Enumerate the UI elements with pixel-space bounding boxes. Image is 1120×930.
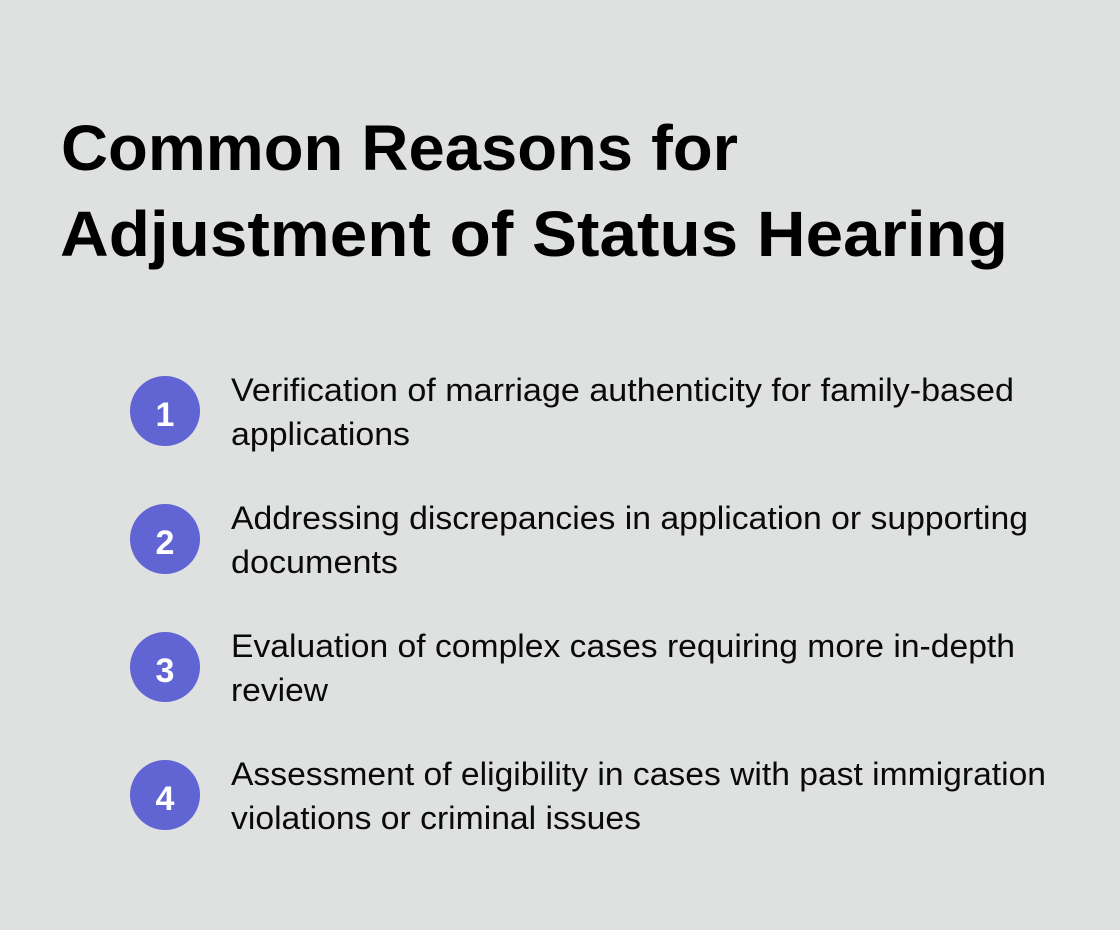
list item 2: 2 (156, 524, 174, 562)
title (60, 112, 1008, 270)
list item 1 (130, 372, 1014, 452)
list item 4: 4 (156, 780, 175, 818)
list item 2 (130, 500, 1028, 580)
list item 1: applications (231, 416, 410, 452)
list item 1: Verification of marriage authenticity for family-based (231, 372, 1014, 408)
title: Common Reasons for (61, 112, 738, 184)
list item 1: 1 (156, 396, 174, 434)
title: Adjustment of Status Hearing (60, 198, 1008, 270)
list item 3: 3 (156, 652, 174, 690)
numbered list (130, 372, 1046, 836)
list item 2: documents (231, 544, 398, 580)
list item 4: Assessment of eligibility in cases with past immigration (231, 756, 1046, 792)
list item 2: Addressing discrepancies in application or supporting (231, 500, 1028, 536)
list item 3: review (231, 672, 329, 708)
list item 4 (130, 756, 1046, 836)
list item 4: violations or criminal issues (231, 800, 641, 836)
list item 3 (130, 628, 1015, 708)
list item 3: Evaluation of complex cases requiring more in-depth (231, 628, 1015, 664)
